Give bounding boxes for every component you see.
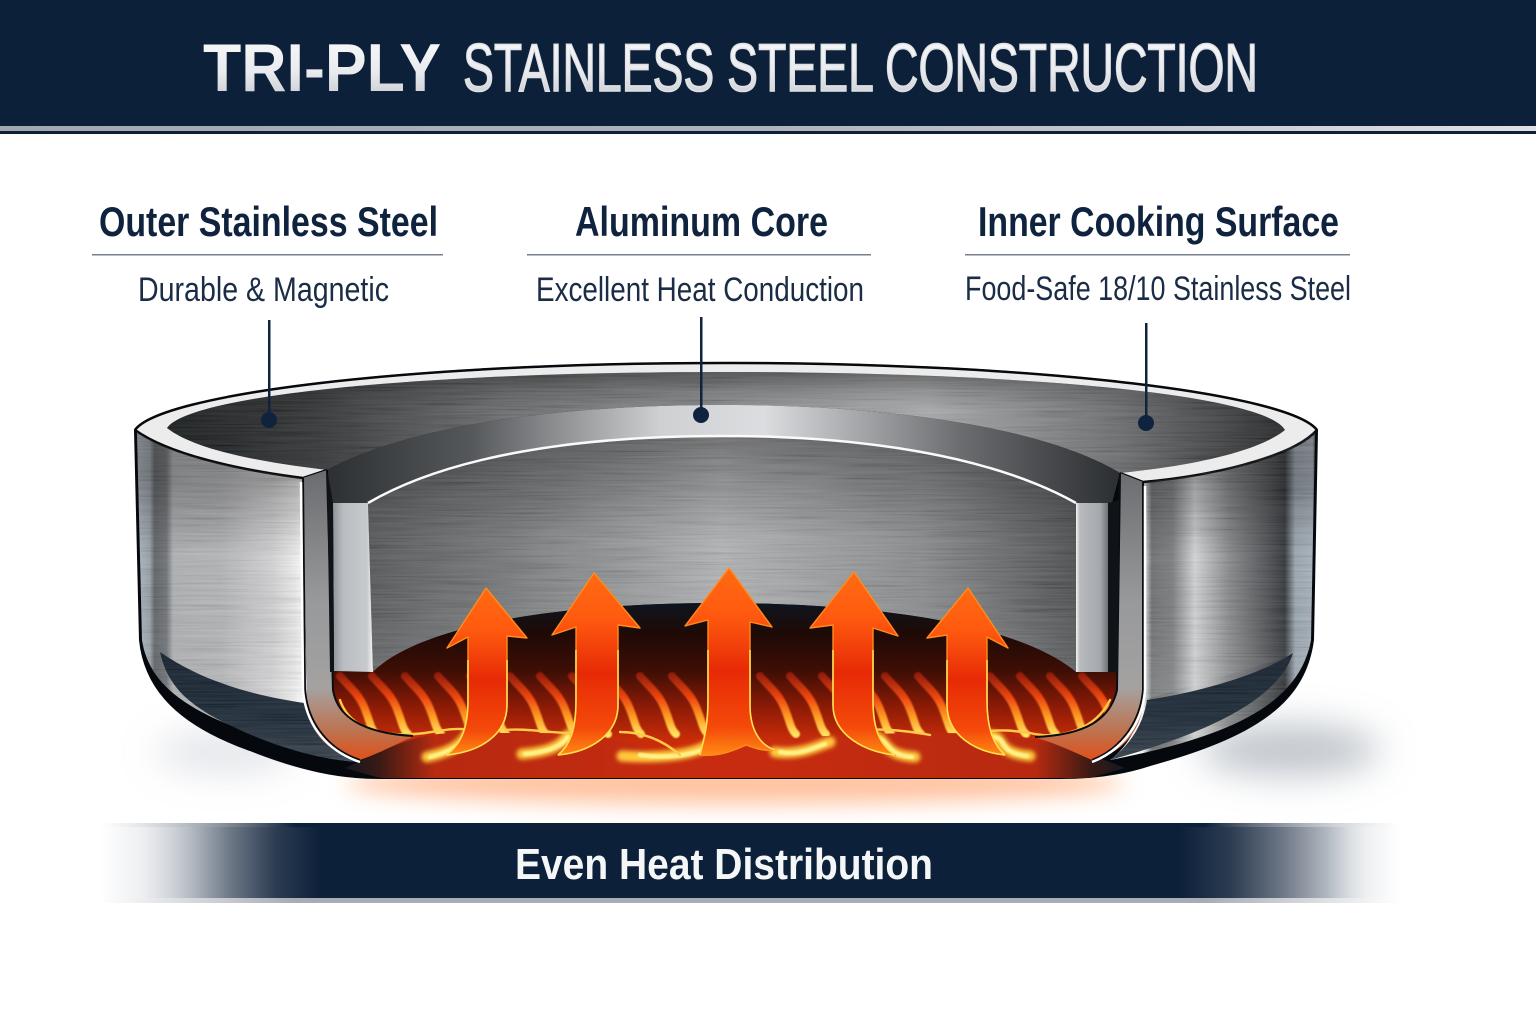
label: outer stainless steel: Outer Stainless Steel (99, 198, 438, 245)
silver inner wall (368, 436, 1076, 672)
heated floor (333, 603, 1118, 770)
yellow heat glow (427, 733, 1030, 757)
heat glow below pan (345, 764, 1125, 804)
banner text: Even Heat Distribution (515, 840, 933, 889)
label: aluminum core: Aluminum Core (575, 198, 828, 245)
heat arrows (446, 568, 1008, 755)
cut wall section right (1035, 473, 1143, 760)
label: inner cooking surface: Food-Safe 18/10 Stainless Steel (965, 270, 1351, 308)
aluminum core band (327, 405, 1120, 503)
interior bowl (167, 372, 1285, 473)
interior bowl top shade (167, 372, 1285, 473)
arrow 5 (927, 588, 1008, 755)
arrow 3 (685, 568, 775, 755)
title banner (0, 0, 1536, 134)
flame stripes (340, 676, 1118, 734)
yellow heat lines (340, 700, 1110, 755)
yellow heat core (430, 735, 1027, 757)
outer wall right (1110, 432, 1315, 760)
label: outer stainless steel: Durable & Magnetic (138, 271, 389, 309)
label: outer stainless steel (92, 198, 443, 309)
callout leader: inner cooking surface (1138, 323, 1154, 431)
title text: TRI-PLY (203, 30, 441, 106)
outer wall right shade (1143, 432, 1315, 700)
core block left (333, 503, 373, 672)
outer wall base shading left (160, 652, 360, 762)
rim top left and back (135, 363, 1317, 482)
dark gap right (1108, 500, 1119, 672)
label: inner cooking surface: Inner Cooking Surface (978, 198, 1339, 245)
outer wall base shading right (1110, 653, 1293, 760)
cut wall section left (303, 470, 413, 760)
pan shadow (155, 724, 1380, 776)
inner wall shade (368, 436, 1076, 672)
dark gap left (327, 470, 334, 672)
arrow shaft highlights (446, 650, 1005, 755)
outer wall left (137, 432, 360, 762)
label: aluminum core (527, 198, 871, 309)
cut wall highlights (301, 482, 1145, 762)
brushed metal texture (130, 365, 1325, 765)
callout leader: outer stainless steel (261, 320, 277, 428)
arrow 4 (810, 572, 898, 755)
core block right (1076, 503, 1108, 672)
label: aluminum core: Excellent Heat Conduction (536, 271, 864, 309)
outer wall left shade (137, 432, 303, 700)
arrow 1 (446, 588, 527, 755)
callout leader: aluminum core (693, 317, 709, 423)
rim outline (135, 363, 1317, 482)
arrow 2 (552, 573, 640, 755)
cutaway pan illustration (130, 363, 1325, 778)
pan silhouette (135, 363, 1317, 778)
cut wall outlines (303, 470, 1143, 760)
red ground (345, 733, 1125, 778)
label: inner cooking surface (965, 198, 1351, 308)
white edge line (368, 436, 1076, 503)
bottom banner (100, 823, 1400, 903)
